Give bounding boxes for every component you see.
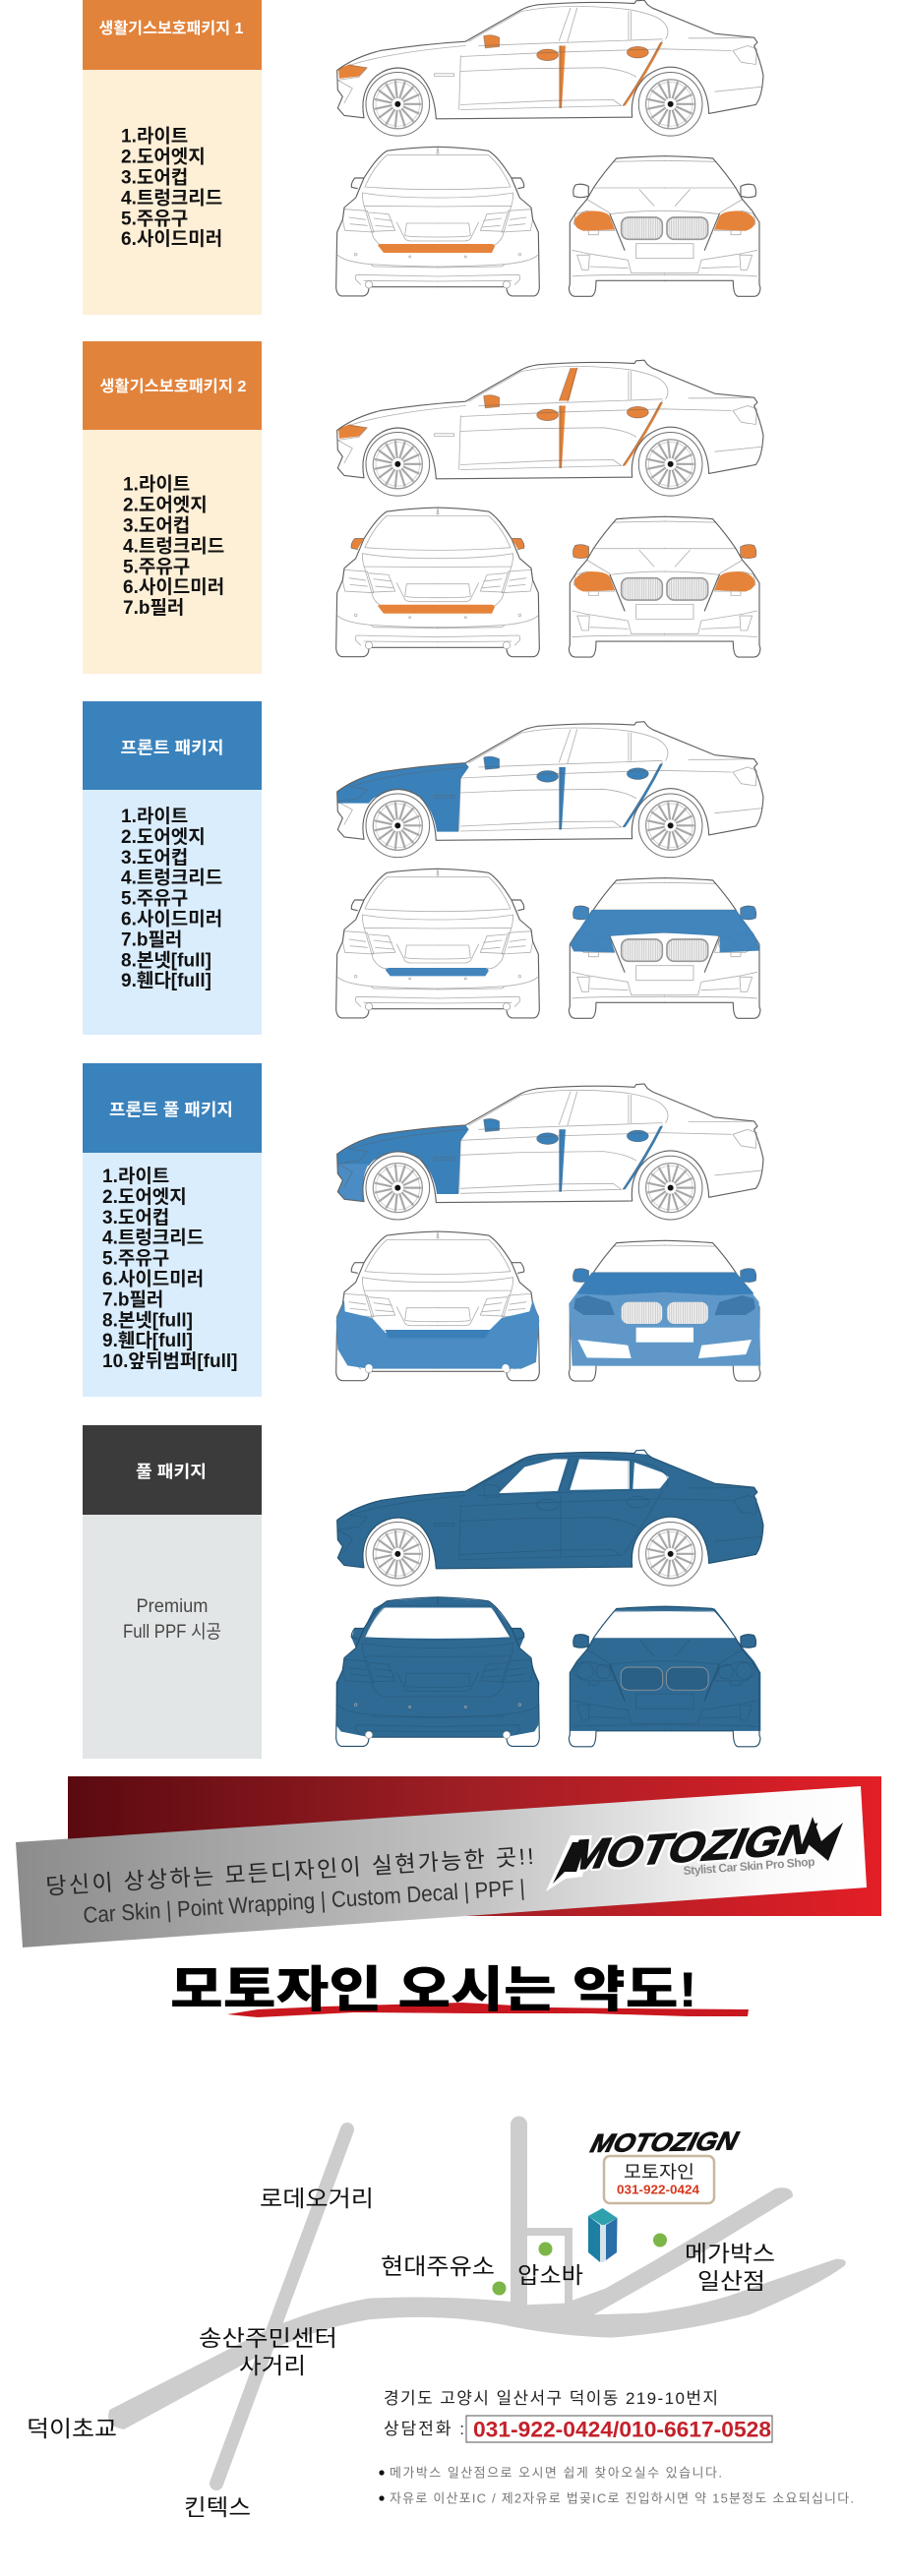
road labels: 덕이초교: [27, 2416, 117, 2441]
list: package items 2: 3.도어컵: [123, 515, 190, 537]
list: package items 4: 9.휀다[full]: [102, 1330, 193, 1351]
list: package items 3: 5.주유구: [121, 889, 188, 910]
list: package items 4: 2.도어엣지: [102, 1186, 187, 1208]
phone number box: 031-922-0424/010-6617-0528: [473, 2418, 771, 2441]
icon: building: [588, 2208, 618, 2262]
car diagram: side view front full package: [337, 1084, 763, 1220]
banner: Motozign: [16, 1776, 881, 1947]
heading: 프론트 풀 패키지: 프론트 풀 패키지: [109, 1101, 233, 1119]
note 1: 메가박스 일산점으로 오시면 쉽게 찾아오실수 있습니다.: [390, 2465, 722, 2481]
list: package items 3: 4.트렁크리드: [121, 868, 222, 889]
text: address: 경기도 고양시 일산서구 덕이동 219-10번지: [384, 2389, 718, 2408]
logo: small MOTOZIGN: MOTOZIGN: [587, 2127, 742, 2158]
note 2: 자유로 이산포IC / 제2자유로 법곶IC로 진입하시면 약 15분정도 소요되십니다.: [390, 2490, 854, 2506]
list: package items 4: 5.주유구: [102, 1249, 169, 1270]
list: package items 2: 6.사이드미러: [123, 576, 224, 598]
car diagram: side view package 1: [337, 0, 763, 136]
list: package items 2: 5.주유구: [123, 557, 190, 577]
list: package items 3: 6.사이드미러: [121, 909, 222, 930]
heading: 생활기스보호패키지 1: 생활기스보호패키지 1: [98, 20, 244, 37]
text: Premium Full PPF 시공: Premium: [136, 1596, 209, 1617]
list: package items 2: 2.도어엣지: [123, 495, 208, 516]
road labels: 메가박스: [685, 2241, 775, 2266]
text: slogan: 당신이 상상하는 모든디자인이 실현가능한 곳!!: [45, 1843, 534, 1899]
logo: MOTOZIGN: [546, 1816, 843, 1891]
list: package items 4: 3.도어컵: [102, 1207, 169, 1228]
road labels: 현대주유소: [381, 2253, 495, 2279]
road labels: [27, 2186, 775, 2520]
heading: 프론트 패키지: 프론트 패키지: [120, 739, 224, 757]
sign: 모토자인: 031-922-0424: [617, 2184, 699, 2197]
car diagram: rear and front views front full package: [336, 1231, 760, 1381]
list: package items 2: 4.트렁크리드: [123, 535, 224, 557]
list: package items 2: 1.라이트: [123, 474, 190, 496]
panel: 생활기스보호패키지 2: [83, 341, 262, 674]
list: package items 4: 1.라이트: [102, 1166, 169, 1187]
landmark dots: [492, 2233, 667, 2296]
panel: 프론트 패키지: [83, 701, 262, 1035]
list: package items 1: 4.트렁크리드: [121, 187, 222, 209]
list: package items 1: 2.도어엣지: [121, 147, 206, 168]
heading: 풀 패키지: 풀 패키지: [136, 1463, 207, 1481]
car diagram: side view package 2: [337, 360, 763, 496]
text: tagline: Stylist Car Skin Pro Shop: [683, 1855, 815, 1878]
panel: 풀 패키지: [83, 1425, 262, 1759]
list: package items 3: 8.본넷[full]: [121, 949, 211, 971]
car diagram: rear and front views front package: [336, 869, 760, 1018]
list: package items 3: 2.도어엣지: [121, 826, 206, 848]
sign: 모토자인: [604, 2156, 714, 2203]
car diagram: rear and front views full package: [336, 1597, 760, 1747]
brush underline: [227, 2003, 749, 2017]
car diagram: rear and front views package 2: [336, 508, 760, 657]
list: package items 1: 5.주유구: [121, 209, 188, 229]
road labels: 압소바: [517, 2262, 583, 2288]
road labels: 킨텍스: [184, 2494, 251, 2520]
list: package items 1: 3.도어컵: [121, 167, 188, 189]
title text: 모토자인 오시는 약도!: [170, 1962, 697, 2017]
text: phone label: 상담전화 :: [384, 2420, 464, 2438]
road labels: 사거리: [239, 2353, 306, 2378]
list: package items 3: 9.휀다[full]: [121, 970, 211, 991]
text: services: Car Skin | Point Wrapping | Custom Decal | PPF |: [83, 1875, 525, 1928]
roads: [108, 2125, 846, 2484]
list: package items 3: 7.b필러: [121, 929, 182, 950]
list: package items 4: 8.본넷[full]: [102, 1309, 193, 1331]
road labels: 로데오거리: [260, 2186, 374, 2211]
logo: MOTOZIGN: MOTOZIGN: [565, 1816, 819, 1880]
list: package items 4: 4.트렁크리드: [102, 1228, 204, 1249]
list: package items 4: 7.b필러: [102, 1288, 163, 1310]
list: package items 3: 1.라이트: [121, 806, 188, 827]
banner: silver slanted strip: [16, 1786, 867, 1947]
banner: red background: [68, 1776, 881, 1916]
car diagram: rear and front views package 1: [336, 147, 760, 296]
heading: 모토자인 오시는 약도!: [170, 1962, 749, 2017]
panel: 프론트 풀 패키지: [83, 1063, 262, 1397]
panel: 생활기스보호패키지 1: [83, 0, 262, 315]
list: package items 1: 6.사이드미러: [121, 228, 222, 250]
car diagram: side view front package: [337, 722, 763, 858]
logo: MOTOZIGN: MOTOZIGN: [565, 1816, 819, 1880]
list: package items 1: 1.라이트: [121, 126, 188, 148]
sign: 모토자인: 모토자인: [624, 2162, 694, 2182]
road labels: 일산점: [697, 2268, 765, 2294]
car diagram: side view full package: [337, 1450, 763, 1586]
road labels: 송산주민센터: [199, 2325, 337, 2351]
list: package items 4: 10.앞뒤범퍼[full]: [102, 1350, 237, 1372]
map: directions: [27, 2125, 854, 2520]
list: package items 2: 7.b필러: [123, 597, 184, 619]
list: package items 3: 3.도어컵: [121, 847, 188, 869]
heading: 생활기스보호패키지 2: 생활기스보호패키지 2: [100, 378, 247, 395]
list: package items 4: 6.사이드미러: [102, 1269, 204, 1290]
text: Premium Full PPF 시공: Full PPF 시공: [123, 1622, 221, 1643]
